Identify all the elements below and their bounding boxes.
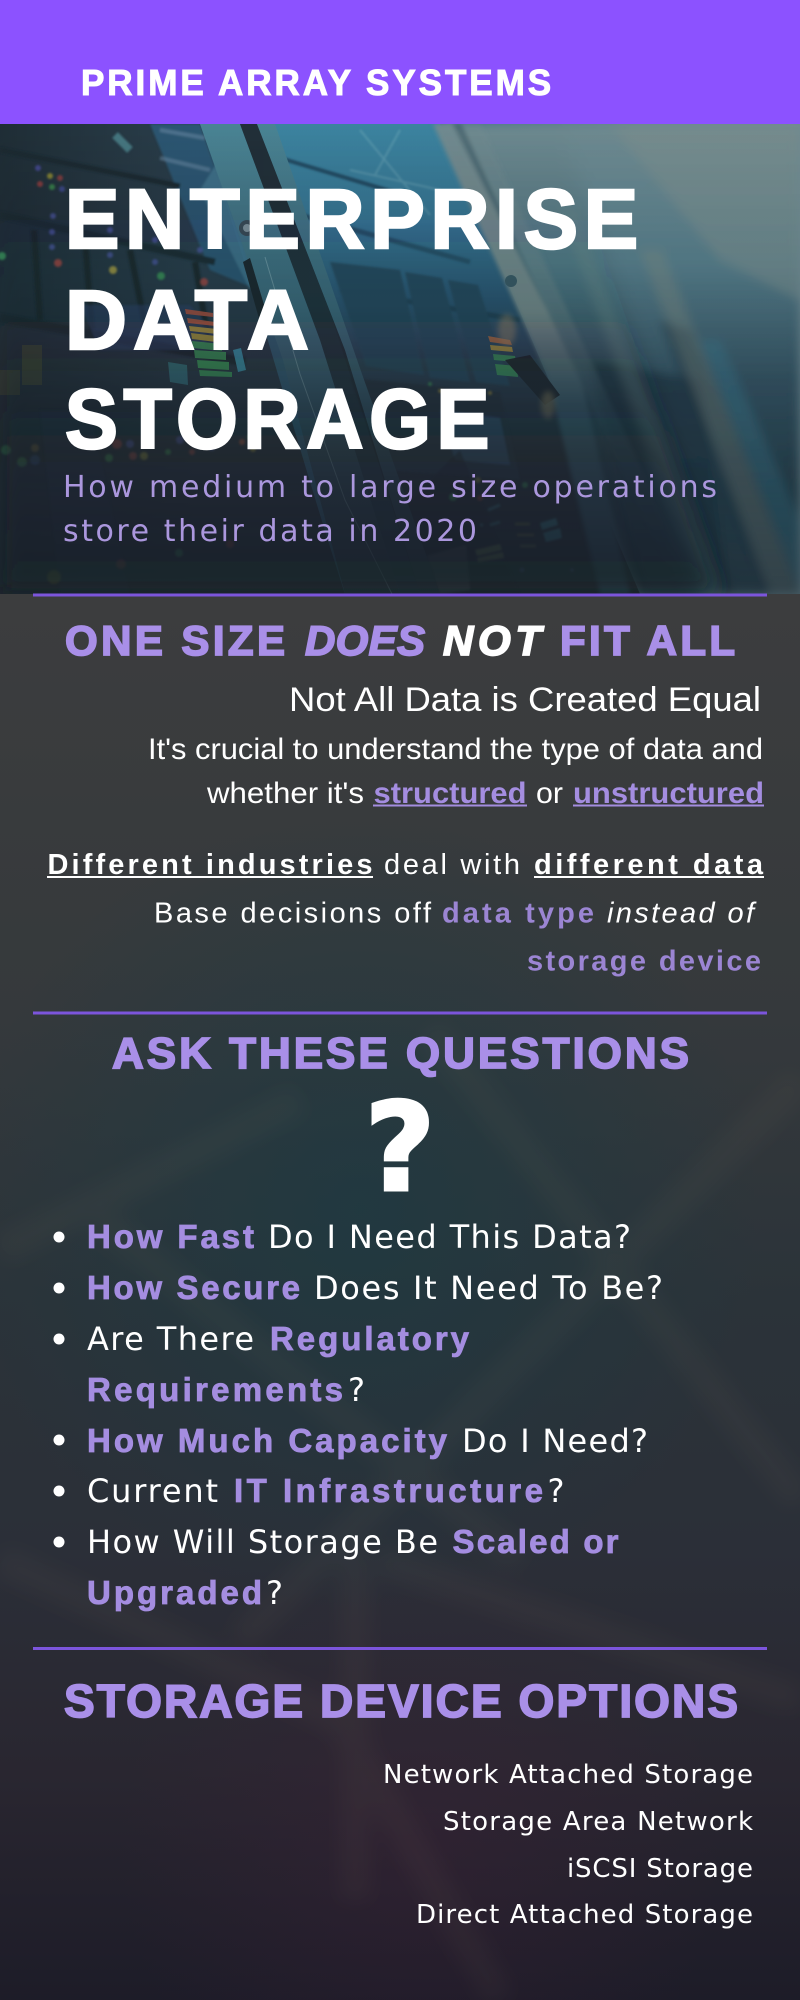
subheading: Not All Data is Created Equal <box>289 681 761 719</box>
industries text block: deal with <box>384 849 520 881</box>
left rack <box>97 124 344 594</box>
section: storage device options <box>64 1675 753 1930</box>
heading: DOES <box>305 617 425 664</box>
question list: How Will Storage Be <box>87 1523 438 1561</box>
question list: Requirements <box>87 1371 343 1408</box>
main title <box>65 172 644 466</box>
subtitle <box>63 470 717 549</box>
question list: Does It Need To Be? <box>314 1269 663 1307</box>
structured text block: whether it's <box>206 777 364 810</box>
heading: FIT ALL <box>560 617 735 664</box>
structured text block: It's crucial to understand the type of data and <box>148 733 763 766</box>
structured text block <box>148 733 764 810</box>
main title: STORAGE <box>65 372 495 466</box>
question list: ? <box>266 1574 283 1612</box>
question list <box>54 1218 663 1612</box>
question list: Do I Need? <box>462 1422 648 1460</box>
heading: STORAGE DEVICE OPTIONS <box>64 1675 738 1727</box>
lower page background <box>0 594 800 2000</box>
status LEDs <box>0 165 574 584</box>
options list: Storage Area Network <box>443 1807 753 1837</box>
structured text block: structured <box>374 777 526 810</box>
divider <box>33 594 767 596</box>
options list: Direct Attached Storage <box>416 1900 753 1930</box>
question list: Are There <box>87 1320 254 1358</box>
question list: ? <box>548 1472 564 1510</box>
industries text block: Base decisions off <box>154 898 432 930</box>
industries text block: data type <box>442 898 594 930</box>
divider <box>33 1647 767 1650</box>
icon: question mark: ? <box>365 1077 435 1219</box>
rack frame bars <box>200 124 629 594</box>
industries text block: Different industries <box>48 849 372 881</box>
subtitle: store their data in 2020 <box>63 514 477 549</box>
heading <box>65 617 735 664</box>
question list: Do I Need This Data? <box>268 1218 631 1256</box>
divider <box>33 1012 767 1014</box>
question list: ? <box>348 1371 365 1409</box>
question list: How Much Capacity <box>87 1422 448 1459</box>
heading: NOT <box>443 617 544 664</box>
header band <box>0 0 800 124</box>
industries text block <box>47 849 764 978</box>
main title: ENTERPRISE <box>65 172 644 266</box>
options list: Network Attached Storage <box>383 1760 753 1790</box>
options list: iSCSI Storage <box>567 1854 753 1884</box>
section: ask these questions <box>54 1029 689 1612</box>
question list: How Fast <box>87 1218 254 1255</box>
options list <box>383 1760 753 1930</box>
heading: ONE SIZE <box>65 617 285 664</box>
level meter bars <box>0 309 518 395</box>
question list: Regulatory <box>270 1320 470 1357</box>
question list: Scaled or <box>452 1523 619 1560</box>
middle rack <box>270 124 640 594</box>
right blurred racks <box>440 124 800 594</box>
hero panel: server rack image <box>0 124 800 594</box>
question list: IT Infrastructure <box>234 1472 543 1509</box>
subtitle: How medium to large size operations <box>63 470 717 505</box>
structured text block: unstructured <box>573 777 764 810</box>
industries text block: storage device <box>527 946 761 978</box>
industries text block: instead of <box>607 898 757 930</box>
heading: ASK THESE QUESTIONS <box>112 1029 689 1078</box>
section: one size does not fit all <box>47 617 764 978</box>
structured text block: or <box>536 777 563 810</box>
question list: Current <box>87 1472 218 1510</box>
industries text block: different data <box>534 849 764 881</box>
main title: DATA <box>65 273 315 367</box>
question list: How Secure <box>87 1269 300 1306</box>
question list: Upgraded <box>87 1574 262 1611</box>
brand name: PRIME ARRAY SYSTEMS <box>81 62 554 103</box>
